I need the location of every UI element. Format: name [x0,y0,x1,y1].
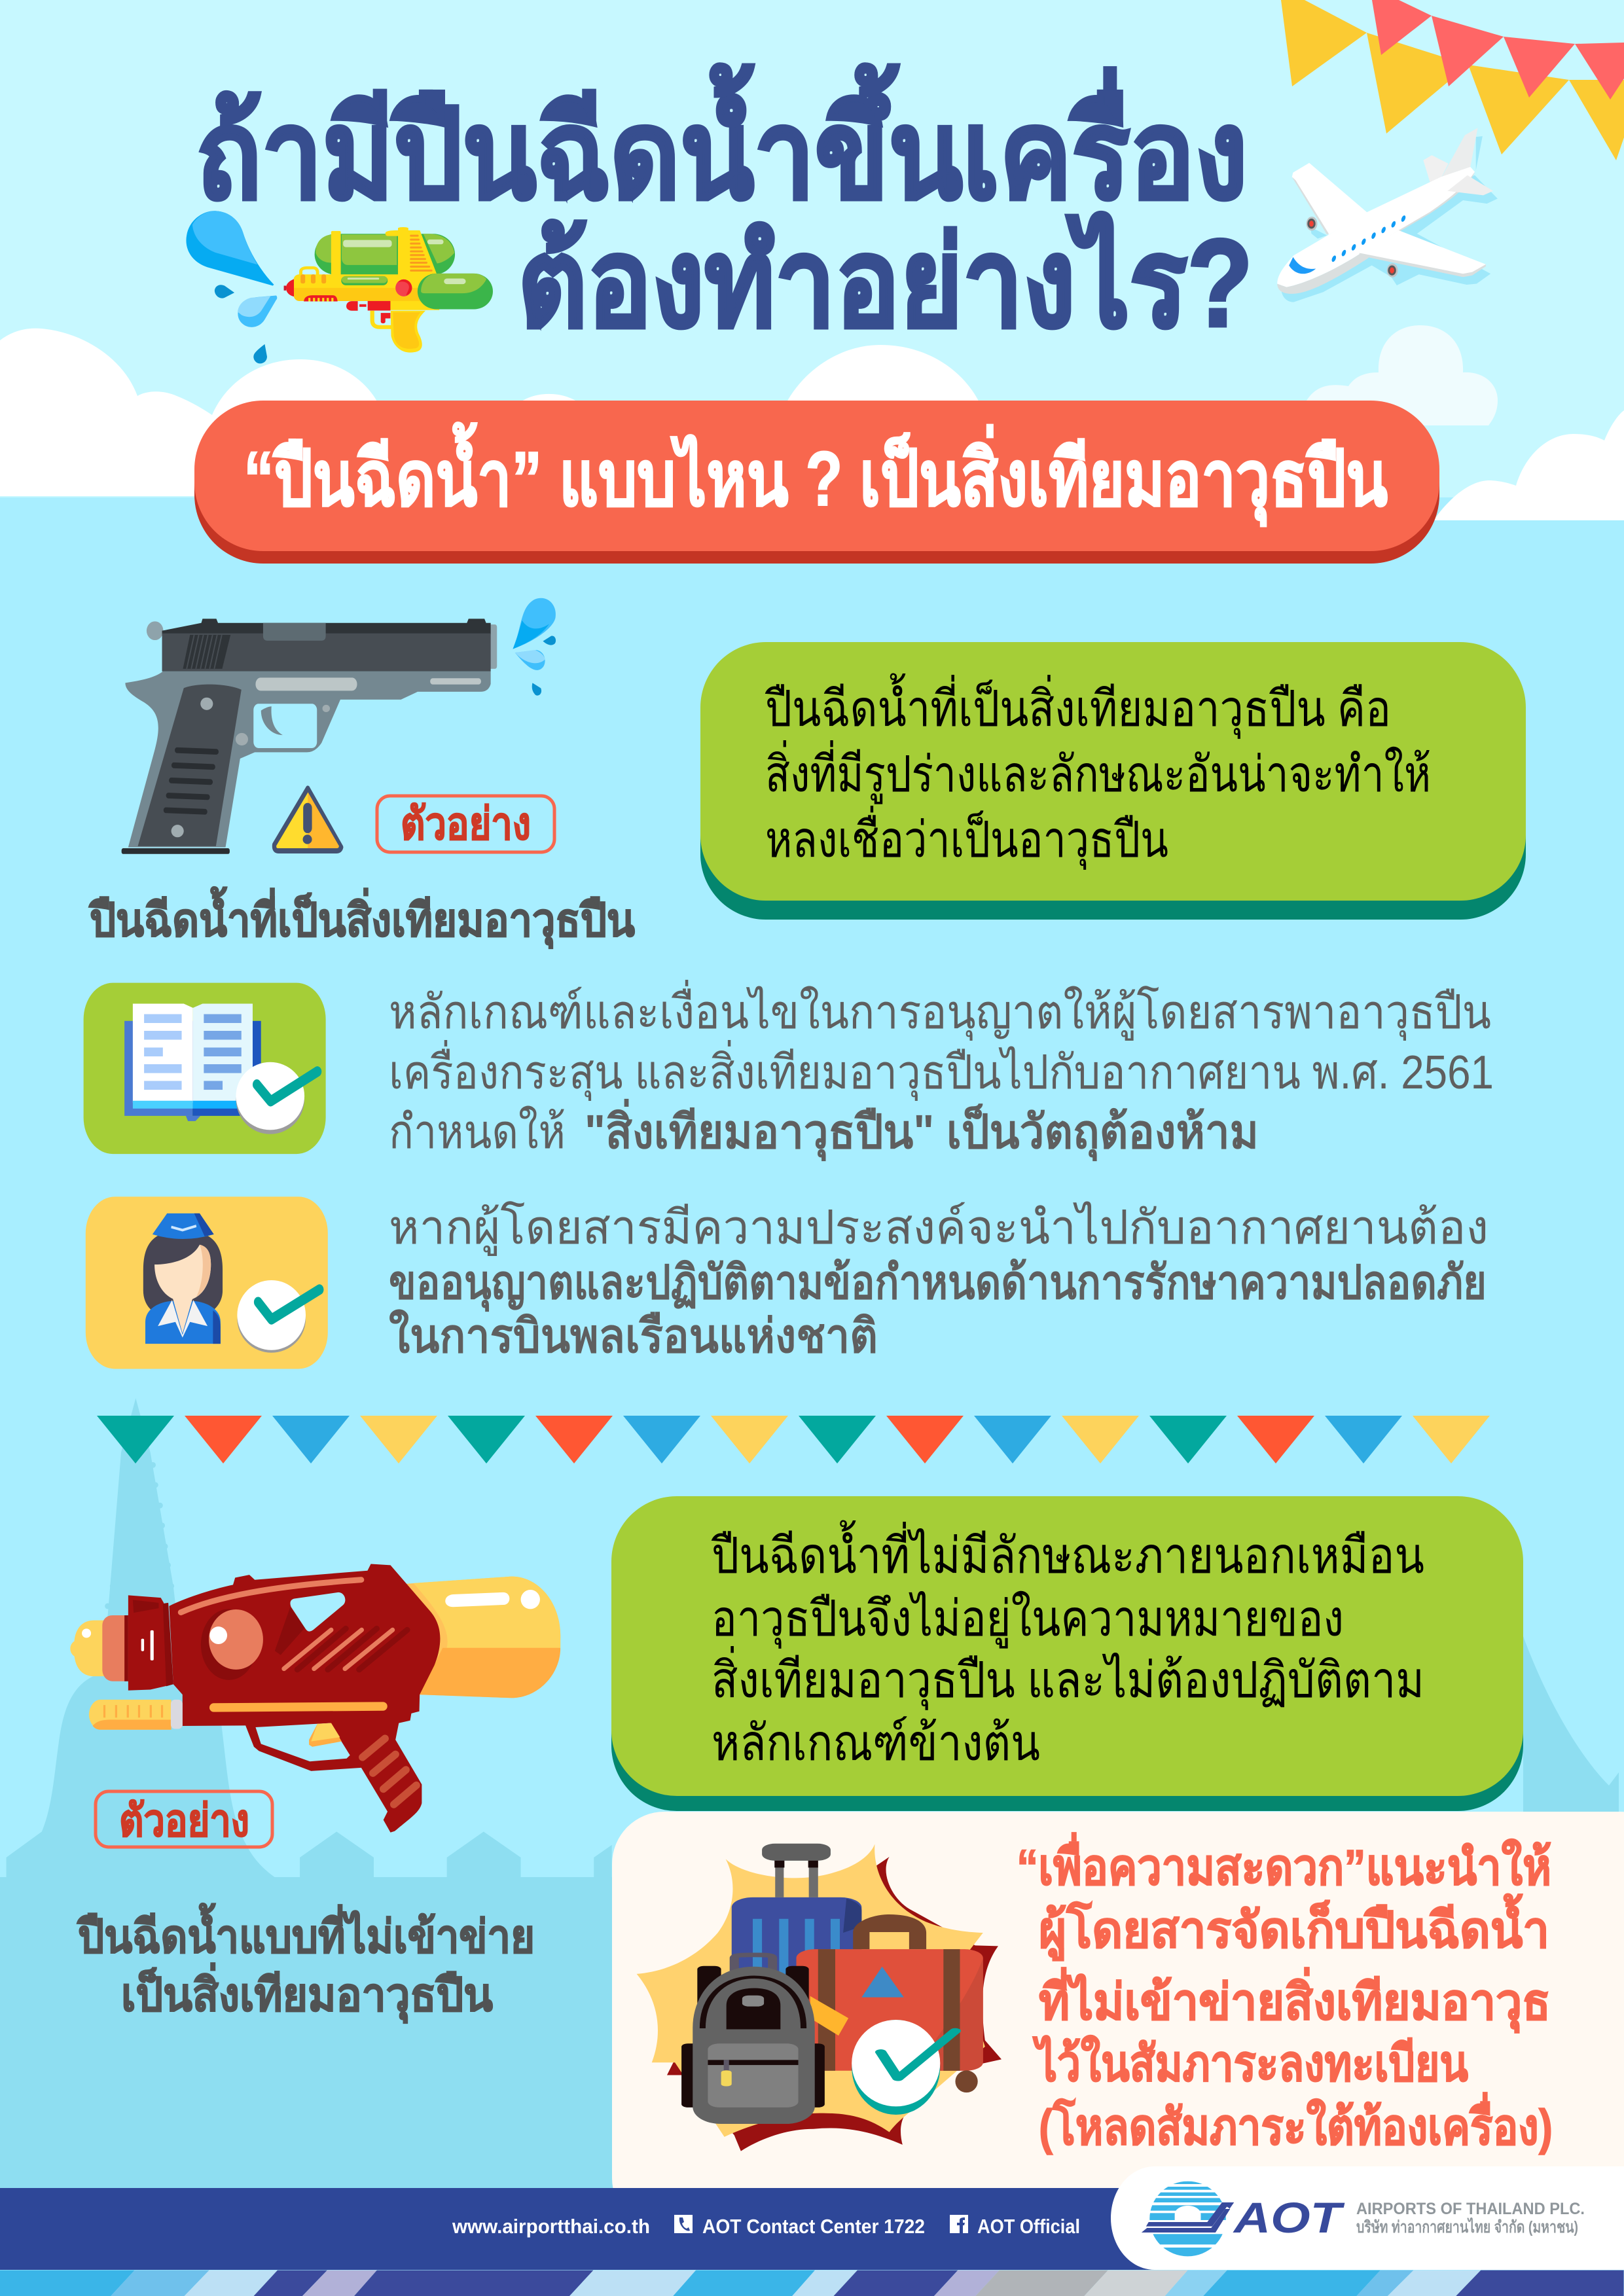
panel: green definition box: ปืนฉีดน้ำที่เป็นสิ่งเทียมอาวุธปืน คือ [765,673,1391,739]
heading: imitation water gun: ปืนฉีดน้ำที่เป็นสิ่งเทียมอาวุธปืน [88,886,635,949]
panel: green definition box: สิ่งที่มีรูปร่างและลักษณะอันน่าจะทำให้ [765,740,1431,804]
logo: company name [1356,2200,1585,2236]
panel: cream advice box [612,1812,1624,2231]
text: regulation paragraph: หลักเกณฑ์และเงื่อนไขในการอนุญาตให้ผู้โดยสารพาอาวุธปืน [389,980,1491,1041]
panel: green explanation box: หลักเกณฑ์ข้างต้น [712,1715,1040,1771]
icon: book on green tile [84,983,326,1154]
footer: contact centre: AOT Contact Center 1722 [702,2215,925,2238]
icon: phone [674,2215,693,2233]
bunting row: 16 flags [97,1416,1490,1463]
text: advice paragraph: ไว้ในสัมภาระลงทะเบียน [1032,2035,1468,2092]
label: example tag 2: ตัวอย่าง [119,1796,249,1846]
icon: yellow water gun with splash [186,211,493,363]
text: advice paragraph: ที่ไม่เข้าข่ายสิ่งเทียมอาวุธ [1039,1967,1551,2034]
text: regulation paragraph: "สิ่งเทียมอาวุธปืน" เป็นวัตถุต้องห้าม [585,1098,1259,1162]
footer: navy bar [0,2188,1624,2270]
footer: facebook name: AOT Official [977,2215,1080,2238]
icon: facebook [950,2215,968,2233]
icon: grey pistol [122,619,497,854]
title: ต้องทำอย่างไร? [518,212,1253,353]
heading: non-imitation water gun [77,1903,535,2024]
icon: red water gun [70,1564,560,1833]
panel: green explanation box: อาวุธปืนจึงไม่อยู่ในความหมายของ [712,1590,1344,1649]
text: regulation paragraph: เครื่องกระสุน และสิ่งเทียมอาวุธปืนไปกับอากาศยาน พ.ศ. 2561 [389,1040,1494,1101]
clouds: left and centre [0,329,984,496]
illustration: temple skyline background [0,1398,1624,2191]
cloud: pale right [1307,325,1498,425]
bunting: top right [1281,0,1624,160]
heading: non-imitation water gun: เป็นสิ่งเทียมอาวุธปืน [121,1962,493,2024]
icon: warning triangle [274,788,341,851]
footer: white logo panel [1111,2166,1624,2270]
text: advice paragraph: “เพื่อความสะดวก”แนะนำให้ [1017,1832,1551,1895]
label: example tag 1: ตัวอย่าง [401,799,531,849]
icon: airplane [1277,128,1498,302]
logo: AOT globe [1142,2181,1234,2257]
text: regulation paragraph [389,980,1494,1162]
panel: green explanation box: ปืนฉีดน้ำที่ไม่มีลักษณะภายนอกเหมือน [711,1520,1424,1584]
banner: heading pill [194,401,1439,564]
text: permission paragraph [389,1200,1489,1363]
footer: colour stripes [0,2270,1624,2296]
heading: non-imitation water gun: ปืนฉีดน้ำแบบที่ไม่เข้าข่าย [77,1903,535,1962]
text: regulation paragraph: กำหนดให้ [389,1105,566,1158]
icon: water splash near pistol [513,598,556,696]
title: ถ้ามีปืนฉีดน้ำขึ้นเครื่อง [196,63,1248,224]
panel: green explanation box [611,1496,1523,1811]
text: permission paragraph: หากผู้โดยสารมีความประสงค์จะนำไปกับอากาศยานต้อง [389,1200,1489,1256]
logo: company name: AIRPORTS OF THAILAND PLC. [1356,2200,1585,2218]
icon: luggage with checkmark [637,1844,1001,2151]
text: permission paragraph: ในการบินพลเรือนแห่งชาติ [389,1308,878,1363]
panel: green explanation box: สิ่งเทียมอาวุธปืน และไม่ต้องปฏิบัติตาม [712,1646,1424,1710]
panel: green definition box: หลงเชื่อว่าเป็นอาวุธปืน [765,806,1168,870]
panel: green definition box [700,642,1526,920]
text: advice paragraph [1017,1832,1553,2155]
title [196,63,1253,353]
cloud: white right [1434,410,1624,520]
logo: AOT wordmark: AOT [1233,2193,1344,2242]
footer: website: www.airportthai.co.th [452,2215,650,2238]
icon: flight attendant on yellow tile [86,1196,328,1369]
text: advice paragraph: ผู้โดยสารจัดเก็บปืนฉีดน้ำ [1039,1893,1549,1961]
